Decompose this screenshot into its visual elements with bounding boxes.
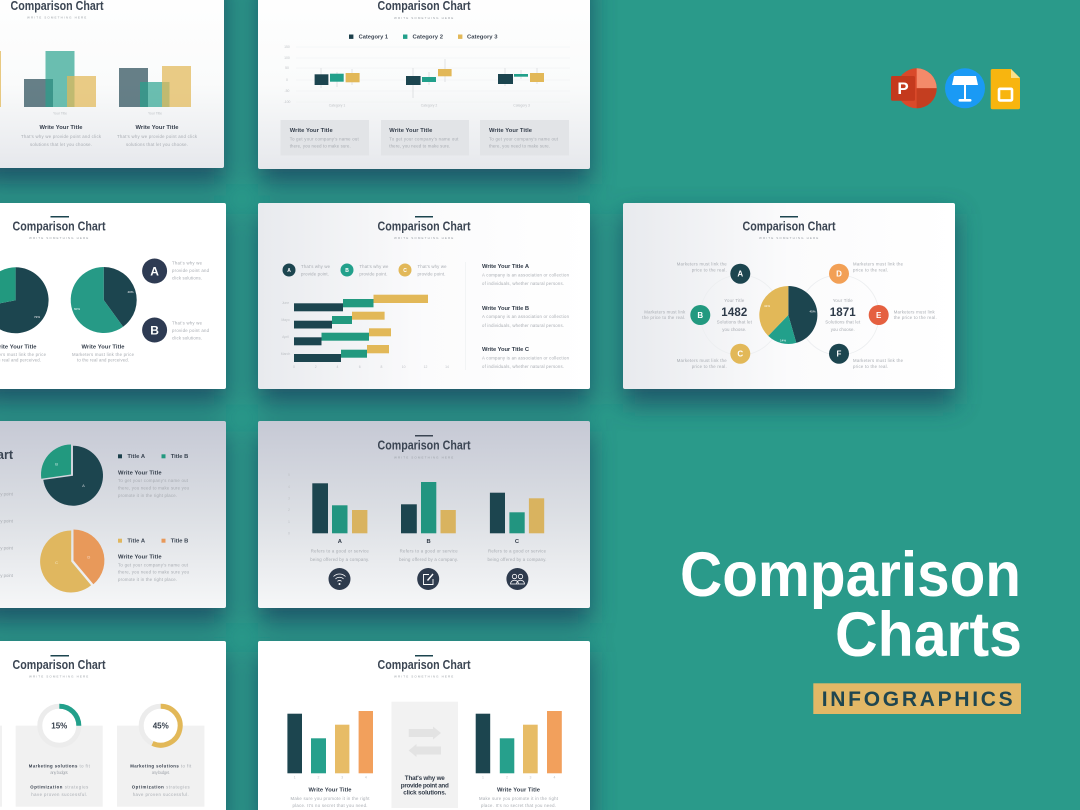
- info panel 45%: any budget.: [152, 770, 170, 775]
- legend items: A: [287, 268, 291, 274]
- text bottom: To get your company's name out: [118, 562, 189, 568]
- panel: central pie card: [623, 203, 955, 389]
- captions: A: [338, 539, 343, 545]
- stat 1871: 1871: [830, 307, 856, 319]
- box plot chart: [284, 45, 570, 108]
- text list: of individuals, whether natural persons.: [482, 281, 564, 286]
- stacked bar chart: 4: [337, 365, 339, 369]
- stacked bar chart: 8: [381, 365, 383, 369]
- stat 1871: Your Title: [833, 298, 853, 303]
- text A: click solutions.: [172, 276, 202, 280]
- subheading: WRITE SOMETHING HERE: [27, 16, 87, 20]
- bar chart left: 4: [365, 776, 367, 780]
- bar chart left: 2: [318, 776, 320, 780]
- caption left: [0, 344, 47, 362]
- text block right: Write Your Title: [136, 125, 179, 131]
- center panel: [392, 702, 458, 808]
- legend items: provide point.: [301, 272, 329, 276]
- grouped bar chart: 0: [288, 531, 290, 535]
- heading bar: [415, 435, 433, 436]
- pie chart right: 60%: [74, 307, 80, 311]
- badge: infographics: [813, 683, 1021, 714]
- node E: [869, 305, 937, 325]
- captions: being offered by a company.: [488, 557, 546, 562]
- text block right: solutions that let you choose.: [126, 142, 188, 147]
- node A: Marketers must link the: [677, 262, 727, 266]
- heading: Comparison Chart: [12, 658, 106, 672]
- bar chart left: 3: [341, 776, 343, 780]
- stacked bar chart: 12: [424, 365, 427, 369]
- text top: Write Your Title: [118, 470, 162, 476]
- title: Comparison: [680, 540, 1021, 610]
- node A: [677, 262, 750, 284]
- grouped bar chart: 5: [288, 473, 290, 477]
- callout boxes: there, you need to make sure.: [290, 144, 351, 148]
- box plot chart: 50: [285, 66, 289, 70]
- legend: Category 3: [467, 35, 498, 41]
- bar chart right: 4: [553, 776, 555, 780]
- panel: stacked bar card: [258, 203, 590, 389]
- captions: Refers to a good or service: [311, 548, 369, 553]
- bar chart right: 1: [482, 776, 484, 780]
- donut 15%: 15%: [51, 722, 67, 730]
- text list: of individuals, whether natural persons.: [482, 323, 564, 328]
- text list: Write Your Title C: [482, 347, 530, 353]
- node C: C: [737, 350, 743, 359]
- caption left: [290, 788, 370, 808]
- text list: Write Your Title B: [482, 306, 529, 312]
- text B: provide point and: [172, 328, 210, 333]
- heading bar: [50, 216, 69, 218]
- node B: the price to the real.: [642, 315, 685, 320]
- overlapping bar chart: Your Title: [148, 112, 162, 116]
- subheading: WRITE SOMETHING HERE: [29, 236, 89, 240]
- legend top: [118, 454, 188, 460]
- text top: [118, 470, 190, 498]
- bar chart left: 1: [294, 776, 296, 780]
- caption right: Marketers must link the price: [72, 352, 135, 357]
- badge A: [142, 258, 167, 284]
- pie chart left: [0, 267, 49, 333]
- box plot chart: -50: [285, 89, 290, 93]
- panel: bar overlap card, top left: [0, 0, 224, 168]
- exploded pie top: [41, 444, 103, 506]
- node C: [677, 344, 750, 369]
- node F: Marketers must link the: [853, 358, 904, 363]
- node F: price to the real.: [853, 364, 888, 369]
- subheading: WRITE SOMETHING HERE: [29, 675, 89, 679]
- legend top: Title A: [127, 454, 146, 460]
- legend bottom: [118, 539, 188, 545]
- text list: of individuals, whether natural persons.: [482, 364, 564, 369]
- text A: That's why we: [172, 260, 203, 266]
- stat 1482: 1482: [721, 307, 747, 319]
- text bottom: promote it in the right place.: [118, 577, 177, 582]
- info panel 45%: Marketing solutions to fit: [130, 764, 192, 768]
- node F: [829, 344, 904, 369]
- captions: [310, 539, 547, 562]
- exploded pie top: A: [82, 483, 85, 488]
- captions: Refers to a good or service: [400, 548, 458, 553]
- captions: being offered by a company.: [399, 557, 458, 562]
- central pie chart: 14%: [780, 338, 786, 342]
- captions: C: [515, 539, 520, 545]
- info panel 15%: have proven successful.: [31, 792, 87, 797]
- caption left: place. It's no secret that you need.: [292, 803, 368, 808]
- callout boxes: there, you need to make sure.: [489, 144, 550, 148]
- heading bar: [415, 216, 433, 218]
- panel: exploded pie card: [0, 421, 226, 608]
- box plot chart: Category 3: [513, 104, 530, 108]
- icon: edit: [417, 568, 439, 590]
- donut 15%: [40, 706, 79, 745]
- info panel 45%: [117, 726, 204, 807]
- legend items: provide point.: [418, 272, 446, 276]
- text block left: [21, 125, 102, 147]
- arrow left: [409, 744, 441, 757]
- subheading: WRITE SOMETHING HERE: [759, 236, 819, 240]
- node A: price to the real.: [692, 268, 727, 272]
- text top: there, you need to make sure you: [118, 486, 190, 490]
- stacked bar chart: June: [282, 301, 289, 305]
- stat 1482: [717, 298, 753, 332]
- caption right: to the real and perceived.: [77, 358, 129, 362]
- text list: [482, 264, 570, 369]
- callout boxes: Write Your Title: [290, 128, 333, 134]
- text B: That's why we: [172, 320, 203, 326]
- legend items: That's why we: [301, 264, 331, 269]
- box plot chart: Category 1: [329, 104, 345, 108]
- icon: Keynote: [945, 68, 985, 108]
- stat 1482: Your Title: [724, 298, 745, 303]
- text bottom: [118, 554, 190, 582]
- stat 1871: [825, 298, 861, 332]
- box plot chart: -100: [284, 100, 291, 104]
- stacked bar chart: 0: [293, 365, 295, 369]
- subheading: WRITE SOMETHING HERE: [394, 675, 454, 679]
- node E: the price to the real.: [894, 315, 937, 320]
- central pie chart: [759, 286, 817, 344]
- bar chart right: [476, 711, 562, 780]
- stat 1482: you choose.: [722, 327, 746, 332]
- grouped bar chart: [288, 473, 544, 535]
- text top: promote it in the right place.: [118, 493, 177, 498]
- donut 45%: 45%: [153, 722, 169, 730]
- center panel text: [401, 775, 449, 797]
- grouped bar chart: 2: [288, 508, 290, 512]
- captions: B: [427, 539, 431, 545]
- info panel 45%: Optimization strategies: [132, 784, 190, 790]
- pie chart right: [71, 267, 137, 333]
- text top: To get your company's name out: [118, 478, 189, 483]
- text block left: solutions that let you choose.: [30, 142, 92, 147]
- heading bar: [415, 655, 433, 656]
- caption right: Make sure you promote it in the right: [479, 796, 559, 801]
- node C: price to the real.: [692, 364, 727, 369]
- stacked bar chart: Mayo: [281, 318, 290, 322]
- bar chart right: 2: [506, 776, 508, 780]
- text bottom: there, you need to make sure you: [118, 570, 190, 575]
- heading: Comparison Chart: [742, 220, 836, 234]
- badge: infographics: INFOGRAPHICS: [822, 688, 1013, 711]
- panel: paired bar card: [258, 641, 590, 810]
- callout boxes: Write Your Title: [389, 128, 433, 134]
- arrow right: [409, 726, 441, 740]
- legend items: B: [345, 268, 349, 274]
- text block left: Write Your Title: [40, 125, 83, 131]
- title: Charts: [835, 600, 1022, 670]
- legend items: That's why we: [359, 264, 389, 269]
- grouped bar chart: 4: [288, 485, 290, 489]
- stat 1871: you choose.: [831, 327, 855, 332]
- center panel text: That's why we: [405, 775, 445, 782]
- central pie chart: 41%: [764, 304, 770, 308]
- heading: Comparison Chart: [378, 220, 471, 234]
- center panel text: provide point and: [401, 782, 449, 789]
- icon: PowerPoint: P: [897, 79, 909, 98]
- heading bar: [780, 216, 798, 218]
- title: [680, 540, 1022, 670]
- text B: [172, 320, 210, 340]
- node E: Marketers must link: [894, 310, 936, 314]
- legend bottom: Title B: [171, 539, 188, 545]
- callout boxes: there, you need to make sure.: [389, 144, 450, 148]
- panel: box plot card: [258, 0, 590, 169]
- central pie chart: 45%: [809, 310, 816, 314]
- pie chart right: 40%: [127, 290, 134, 294]
- overlapping bar chart: Your Title: [53, 112, 67, 116]
- legend items: provide point.: [359, 272, 387, 276]
- info panel 15%: Marketing solutions to fit: [29, 764, 91, 768]
- exploded pie bottom: D: [87, 554, 90, 560]
- node B: B: [697, 311, 703, 320]
- node B: Marketers must link: [644, 310, 686, 314]
- callout boxes: [280, 120, 569, 156]
- callout boxes: To get your company's name out: [489, 136, 559, 142]
- caption right: Write Your Title: [497, 788, 541, 794]
- node D: price to the real.: [853, 268, 888, 272]
- heading: Comparison Chart: [12, 220, 106, 234]
- heading: Comparison Chart: [378, 438, 471, 452]
- text A: [172, 260, 210, 280]
- stacked bar chart: 6: [359, 365, 361, 369]
- icon: wifi: [328, 568, 350, 590]
- legend: Category 1: [359, 35, 389, 41]
- legend: [349, 34, 498, 41]
- badge A: A: [150, 264, 159, 278]
- legend: Category 2: [412, 35, 443, 41]
- text list: A company is an association or collection: [482, 356, 570, 360]
- partial list text: [0, 492, 14, 578]
- panel sliver: [0, 726, 2, 807]
- overlapping bar chart: [0, 51, 191, 116]
- info panel 45%: have proven successful.: [133, 792, 189, 797]
- text B: click solutions.: [172, 336, 202, 340]
- stacked bar chart: [281, 295, 449, 369]
- stacked bar chart: 10: [402, 365, 406, 369]
- text list: A company is an association or collection: [482, 272, 570, 278]
- node E: E: [876, 311, 882, 320]
- caption left: Write Your Title: [308, 788, 352, 794]
- legend items: That's why we: [418, 264, 447, 269]
- subheading: WRITE SOMETHING HERE: [394, 16, 454, 20]
- icon: PowerPoint: [891, 68, 937, 108]
- stacked bar chart: 2: [315, 365, 317, 369]
- exploded pie bottom: C: [55, 560, 58, 565]
- heading bar: [50, 655, 69, 656]
- pie chart left: 72%: [34, 315, 40, 319]
- text bottom: Write Your Title: [118, 554, 162, 560]
- info panel 15%: [16, 726, 103, 807]
- text list: Write Your Title A: [482, 264, 530, 270]
- panel: pie comparison card: [0, 203, 226, 389]
- callout boxes: To get your company's name out: [389, 136, 459, 142]
- node D: D: [836, 270, 842, 279]
- grouped bar chart: 1: [288, 520, 290, 524]
- legend items: C: [403, 268, 407, 274]
- info panel 15%: any budget.: [50, 770, 68, 775]
- grouped bar chart: 3: [288, 496, 290, 500]
- captions: Refers to a good or service: [488, 548, 547, 553]
- legend bottom: Title A: [127, 539, 146, 545]
- bar chart right: 3: [529, 776, 531, 780]
- heading: Comparison Chart: [378, 658, 471, 672]
- callout boxes: To get your company's name out: [290, 136, 359, 142]
- panel: donut card: [0, 641, 226, 810]
- text block right: [117, 125, 198, 147]
- badge B: [142, 318, 167, 342]
- info panel 15%: Optimization strategies: [30, 784, 88, 790]
- connector rings: [700, 275, 879, 355]
- caption right: Write Your Title: [82, 344, 125, 350]
- text block right: That's why we provide point and click: [117, 134, 198, 139]
- subheading: WRITE SOMETHING HERE: [394, 455, 454, 459]
- donut 45%: [141, 706, 180, 745]
- stacked bar chart: March: [281, 352, 290, 356]
- caption right: [72, 344, 135, 362]
- subheading: WRITE SOMETHING HERE: [394, 236, 454, 240]
- legend items: [282, 264, 447, 276]
- legend top: Title B: [171, 454, 188, 460]
- stacked bar chart: April: [282, 335, 289, 339]
- stat 1871: Solutions that let: [825, 320, 861, 324]
- caption left: Make sure you promote it in the right: [290, 796, 370, 801]
- center panel text: click solutions.: [403, 790, 447, 797]
- box plot chart: 100: [284, 56, 290, 60]
- node F: F: [837, 350, 842, 359]
- text A: provide point and: [172, 268, 210, 273]
- exploded pie bottom: [40, 530, 104, 592]
- callout boxes: Write Your Title: [489, 128, 533, 134]
- captions: being offered by a company.: [310, 557, 369, 562]
- stat 1482: Solutions that let: [717, 320, 753, 324]
- node B: [642, 305, 710, 325]
- stacked bar chart: 14: [445, 365, 449, 369]
- text block left: That's why we provide point and click: [21, 134, 102, 139]
- box plot chart: 0: [286, 78, 288, 82]
- node A: A: [737, 270, 743, 279]
- bar chart left: [287, 711, 373, 780]
- panel: grouped bar card: [258, 421, 590, 608]
- box plot chart: 150: [284, 45, 290, 49]
- badge B: B: [150, 324, 159, 338]
- caption right: place. It's no secret that you need.: [481, 803, 556, 808]
- icon: people: [506, 568, 528, 590]
- text list: A company is an association or collection: [482, 314, 570, 319]
- node D: Marketers must link the: [853, 262, 904, 266]
- node D: [829, 262, 904, 284]
- caption right: [479, 788, 559, 808]
- box plot chart: Category 2: [421, 104, 437, 108]
- icon: Google Slides: [991, 69, 1020, 109]
- node C: Marketers must link the: [677, 358, 727, 363]
- exploded pie top: B: [55, 462, 58, 466]
